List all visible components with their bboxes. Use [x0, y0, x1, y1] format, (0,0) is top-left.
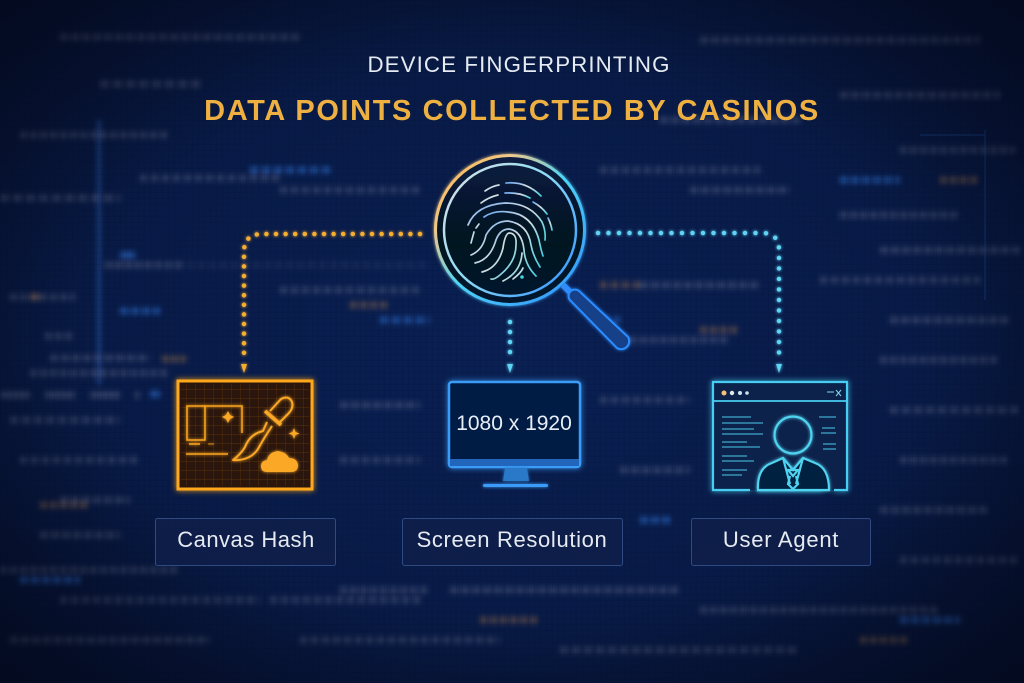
panel: user agent icon: [713, 382, 847, 490]
connector: blue dotted line to screen resolution: [507, 322, 513, 373]
icon: magnifying glass with fingerprint: [436, 156, 629, 349]
paintbrush glyph: [233, 398, 292, 460]
browser dots: [722, 390, 841, 396]
connector: cyan dotted line to user agent: [598, 233, 782, 373]
user silhouette: [758, 416, 829, 490]
resolution value: 1080 x 1920: [456, 412, 572, 435]
panel: screen resolution icon: [449, 382, 580, 487]
label: screen resolution: [402, 518, 622, 566]
fingerprint: [468, 183, 552, 281]
label: user agent: [692, 518, 870, 566]
panel: canvas hash icon: [178, 381, 312, 489]
magnifier handle: [563, 285, 629, 349]
title: device fingerprinting: DEVICE FINGERPRINTING: [367, 52, 671, 77]
cloud icon: [261, 451, 298, 472]
canvas window glyph: [186, 406, 242, 454]
label: canvas hash: [156, 518, 336, 566]
browser frame: [713, 382, 847, 490]
label: user agent: User Agent: [723, 527, 839, 552]
monitor stand: [483, 468, 548, 487]
magnifier lens: [436, 156, 584, 304]
label: screen resolution: Screen Resolution: [417, 527, 607, 552]
fingerprint dot: [520, 275, 524, 279]
sparkle icons: [222, 411, 300, 439]
heading: data points collected by casinos: DATA POINTS COLLECTED BY CASINOS: [204, 95, 820, 127]
orange frame: [178, 381, 312, 489]
monitor screen: [449, 382, 580, 467]
browser text lines: [722, 417, 836, 475]
connector: orange dotted line to canvas hash: [241, 234, 420, 373]
label: canvas hash: Canvas Hash: [177, 527, 315, 552]
